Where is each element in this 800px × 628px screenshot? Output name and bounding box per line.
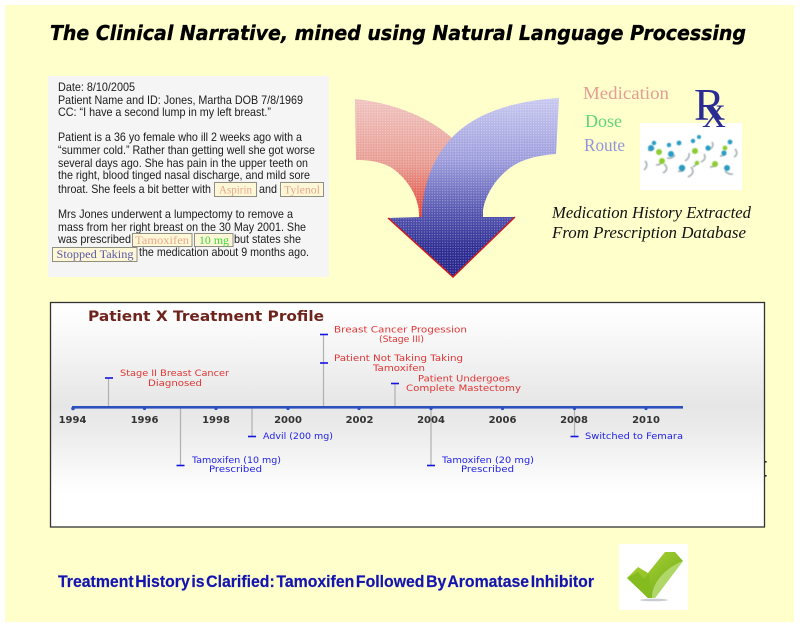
event: mastectomy: [406, 374, 521, 394]
frame specks: [765, 461, 767, 477]
image: molecules: [640, 123, 742, 190]
arrow red branch: [355, 99, 452, 218]
event: mastectomy: Patient Undergoes: [418, 374, 511, 384]
note header text: Patient Name and ID: Jones, Martha DOB 7/8/1969: [58, 93, 303, 107]
note paragraph one: the right, blood tinged nasal discharge, and mild sore: [58, 168, 310, 182]
axis year labels: [59, 415, 660, 426]
note paragraph two: Mrs Jones underwent a lumpectomy to remove a: [58, 207, 293, 221]
tag: 10 mg: 10 mg: [199, 233, 229, 247]
panel: clinical note: [48, 76, 329, 277]
timeline heading: Patient X Treatment Profile: [88, 309, 324, 325]
event: stage II diagnosis: Diagnosed: [148, 379, 202, 389]
axis year labels: 2006: [489, 415, 516, 426]
note paragraph one: and: [259, 182, 277, 196]
note paragraph two: was prescribed: [57, 232, 131, 246]
axis year labels: 2002: [346, 415, 373, 426]
note paragraph one: “summer cold.” Rather than getting well she got worse: [58, 143, 315, 157]
event: advil: Advil (200 mg): [263, 432, 333, 442]
axis year labels: 2008: [560, 415, 588, 426]
label: Dose: Dose: [585, 111, 622, 131]
tag: Tylenol: Tylenol: [284, 182, 321, 196]
event: stage II diagnosis: [120, 369, 230, 389]
event: tamoxifen 10 mg: Prescribed: [209, 465, 262, 475]
axis year labels: 1994: [59, 415, 86, 426]
note header text: CC: “I have a second lump in my left breast.”: [58, 105, 271, 119]
event: tamoxifen 20 mg: [441, 456, 534, 475]
arrow: merging medication data: [355, 98, 559, 277]
icon: Rx symbol: R: [694, 79, 725, 130]
axis year labels: 1998: [202, 415, 230, 426]
note paragraph two: the medication about 9 months ago.: [139, 245, 309, 259]
note header text: Date: 8/10/2005: [58, 80, 135, 94]
event: not taking tamoxifen: Patient Not Taking Taking: [334, 354, 463, 364]
note background: [48, 76, 329, 277]
event: not taking tamoxifen: [334, 354, 463, 374]
timeline axis: [71, 406, 683, 410]
note paragraph two: but states she: [234, 232, 301, 246]
event: mastectomy: Complete Mastectomy: [406, 384, 521, 394]
event: cancer progression: Breast Cancer Progession: [334, 326, 467, 336]
event: tamoxifen 10 mg: [191, 456, 281, 475]
note header text: [58, 80, 303, 119]
event: cancer progression: (Stage III): [379, 335, 424, 345]
tag: Stopped Taking: Stopped Taking: [56, 247, 134, 261]
event: tamoxifen 10 mg: Tamoxifen (10 mg): [191, 456, 281, 466]
event: tamoxifen 20 mg: Tamoxifen (20 mg): [441, 456, 534, 466]
caption: medication history: Medication History Extracted: [551, 203, 752, 222]
arrow blue branch and head: [388, 98, 559, 277]
note paragraph one: Patient is a 36 yo female who ill 2 weeks ago with a: [58, 130, 302, 144]
panel: treatment timeline: [50, 302, 764, 527]
conclusion text: Treatment History is Clarified: Tamoxifen Followed By Aromatase Inhibitor: [58, 572, 594, 591]
axis year labels: 2010: [632, 415, 660, 426]
tag: Tamoxifen: Tamoxifen: [135, 233, 189, 247]
icon: green check mark: [619, 544, 688, 610]
event stems: [108, 334, 574, 465]
timeline frame: [50, 302, 764, 527]
event markers: [105, 334, 578, 466]
note paragraph one: [58, 130, 315, 196]
event: cancer progression: [334, 326, 467, 345]
event: switched to femara: Switched to Femara: [585, 432, 683, 442]
event: not taking tamoxifen: Tamoxifen: [372, 364, 425, 374]
icon: Rx symbol: X: [702, 99, 726, 135]
caption: medication history: [551, 203, 752, 242]
tag: Aspirin: Aspirin: [219, 182, 252, 196]
caption: medication history: From Prescription Database: [551, 223, 746, 242]
label: Medication: Medication: [583, 83, 669, 103]
event: tamoxifen 20 mg: Prescribed: [461, 465, 514, 475]
axis year labels: 2000: [274, 415, 302, 426]
note paragraph one: several days ago. She has pain in the upper teeth on: [58, 156, 308, 170]
title: The Clinical Narrative, mined using Natural Language Processing: [50, 21, 746, 45]
note paragraph two: [57, 207, 309, 259]
axis year labels: 1996: [131, 415, 158, 426]
note paragraph two: mass from her right breast on the 30 May 2001. She: [58, 220, 306, 234]
note paragraph one: throat. She feels a bit better with: [58, 182, 211, 196]
axis year labels: 2004: [417, 415, 445, 426]
label: Route: Route: [584, 135, 625, 155]
arrow head red edge: [388, 217, 515, 277]
event: stage II diagnosis: Stage II Breast Cancer: [120, 369, 230, 379]
